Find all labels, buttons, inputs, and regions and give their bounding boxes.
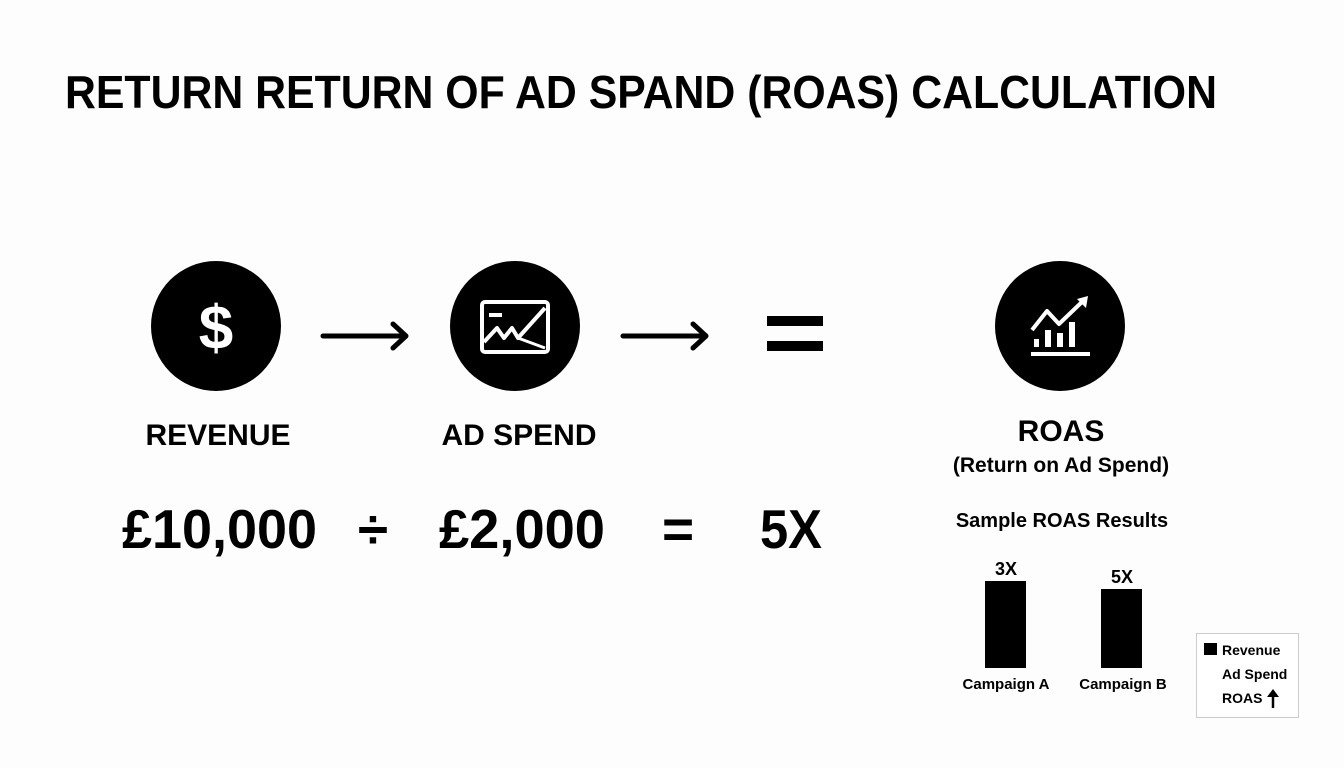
legend: Ad Spend (1222, 666, 1287, 682)
chart title: Sample ROAS Results (956, 510, 1168, 532)
bar chart (963, 559, 1167, 693)
legend: Revenue (1222, 642, 1281, 658)
label: revenue: REVENUE (145, 419, 291, 452)
equals sign (767, 316, 823, 351)
bar chart: 5X (1111, 567, 1133, 587)
icon: dollar circle (151, 261, 281, 391)
equation: £2,000 (439, 498, 605, 560)
equation: = (662, 498, 694, 560)
icon: growth chart circle (995, 261, 1125, 391)
bar chart: 3X (995, 559, 1017, 579)
equation (122, 498, 822, 560)
arrow 2 (623, 324, 706, 348)
equation: ÷ (358, 498, 388, 560)
label: roas: ROAS (1018, 415, 1104, 448)
arrow 1 (323, 324, 406, 348)
title: RETURN RETURN OF AD SPAND (ROAS) CALCULATION (65, 66, 1217, 118)
label: ad spend: AD SPEND (441, 419, 597, 452)
icon: ad image circle (450, 261, 580, 391)
equation: £10,000 (122, 498, 317, 560)
legend (1196, 634, 1298, 718)
bar chart: Campaign B (1079, 676, 1167, 693)
label: roas (953, 415, 1169, 477)
legend: ROAS (1222, 690, 1262, 706)
equation: 5X (760, 498, 822, 560)
label: roas: (Return on Ad Spend) (953, 454, 1169, 477)
icon: dollar circle: $ (199, 294, 233, 363)
bar chart: Campaign A (963, 676, 1050, 693)
